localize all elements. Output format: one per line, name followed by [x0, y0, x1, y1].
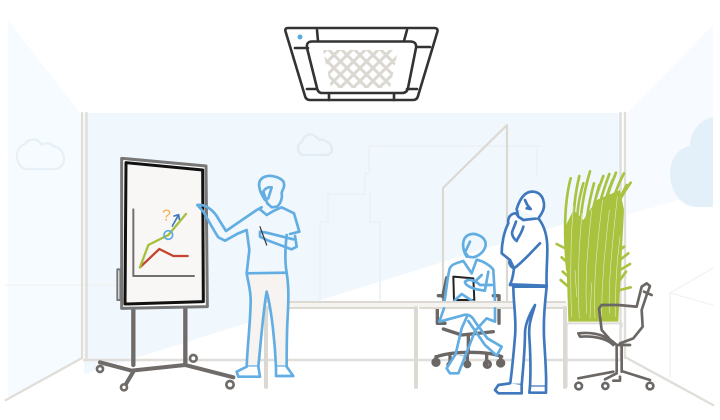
presenter pen — [260, 227, 267, 245]
crossed legs — [439, 308, 495, 357]
faint wall lines — [6, 268, 713, 377]
green line — [140, 214, 186, 267]
seated torso — [444, 260, 495, 305]
waistband — [510, 285, 546, 286]
plant — [557, 171, 631, 387]
chair back — [599, 283, 652, 343]
seated person's chair — [433, 278, 504, 367]
arm — [509, 222, 540, 268]
office chair — [575, 283, 653, 389]
presenter torso — [197, 205, 299, 273]
plant planter — [567, 323, 622, 387]
plant highlights — [571, 197, 620, 318]
presenter — [197, 176, 299, 377]
display stand — [97, 308, 234, 390]
presenter head — [259, 176, 284, 207]
display frame — [122, 158, 207, 308]
standing man upper body — [502, 192, 547, 286]
clipboard — [453, 277, 474, 300]
torso — [502, 213, 547, 286]
ac panel — [307, 42, 416, 93]
plant foliage — [565, 190, 624, 322]
left wall — [8, 20, 80, 398]
chart axes — [133, 209, 194, 276]
shoes — [495, 383, 546, 393]
presenter shoes — [237, 367, 293, 377]
chair base — [578, 347, 650, 381]
cloud: left — [17, 139, 64, 169]
display screen — [125, 163, 203, 304]
room frame — [6, 113, 713, 405]
ac housing — [285, 28, 438, 100]
seated person legs — [439, 308, 502, 373]
standing man legs — [495, 287, 547, 393]
chair seat — [578, 333, 630, 345]
shoes — [447, 338, 502, 373]
red line — [140, 249, 188, 267]
flipchart display — [97, 158, 234, 390]
right wall — [627, 25, 713, 215]
meeting table — [262, 302, 565, 387]
plant blades — [557, 171, 631, 290]
standing man head — [517, 192, 544, 220]
window — [84, 113, 622, 374]
seated person upper body — [444, 234, 495, 305]
ac grille — [323, 50, 397, 88]
highlight circle — [164, 231, 173, 239]
glass partition — [443, 125, 507, 303]
cloud: small — [298, 134, 332, 155]
ac braces — [295, 30, 430, 100]
ac indicator — [298, 34, 302, 40]
chart on display — [133, 208, 194, 276]
chair wheels — [575, 383, 653, 389]
seated head — [463, 234, 486, 257]
cloud: right — [670, 117, 716, 207]
ceiling air conditioner — [284, 26, 439, 102]
question mark: ? — [162, 208, 171, 225]
trend arrow — [172, 215, 179, 226]
presenter trousers — [247, 273, 288, 367]
skyline — [320, 146, 540, 300]
display handle — [117, 269, 120, 300]
trousers — [510, 287, 547, 387]
